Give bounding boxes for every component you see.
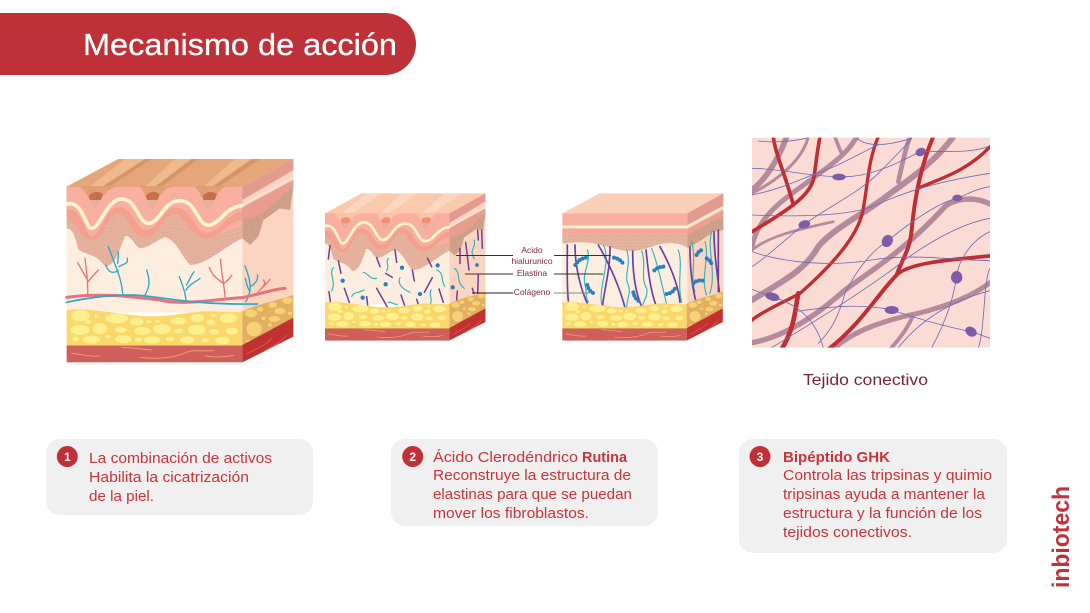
callout labels: skin components: Elastina [517, 268, 547, 278]
card 2: clerodendric acid and rutin: Rutina [582, 449, 628, 466]
card 2: clerodendric acid and rutin [391, 439, 658, 526]
card 1: combination of actives: Habilita la cicatrización [89, 469, 249, 486]
callout labels: skin components: hialurunico [511, 256, 553, 266]
skin block: dermis with collagen and elastin [325, 193, 485, 341]
card 1: combination of actives: 1 [64, 450, 71, 464]
card 3: GHK bipeptide: tripsinas ayuda a mantener la [783, 486, 986, 503]
card 3: GHK bipeptide: estructura y la función de los [783, 505, 982, 522]
card 2: clerodendric acid and rutin: mover los fibroblastos. [433, 505, 589, 522]
card 2: clerodendric acid and rutin: 2 [409, 450, 416, 464]
callout labels: skin components [456, 245, 611, 297]
card 3: GHK bipeptide: Bipéptido GHK [783, 449, 890, 466]
skin block: flat skin with restored fibres [562, 193, 723, 341]
card 1: combination of actives: de la piel. [89, 488, 154, 505]
card 2: clerodendric acid and rutin: Reconstruye la estructura de [433, 467, 631, 484]
panel caption: connective tissue: Tejido conectivo [803, 372, 928, 389]
callout labels: skin components: Acido [521, 245, 543, 255]
connective tissue panel [752, 137, 990, 349]
card 1: combination of actives [46, 439, 313, 515]
card 2: clerodendric acid and rutin: elastinas para que se puedan [433, 486, 632, 503]
brand wordmark: inbiotech [1048, 486, 1075, 588]
title banner: Mecanismo de acción [83, 27, 397, 62]
title banner [0, 13, 416, 75]
card 1: combination of actives: La combinación de activos [89, 450, 272, 467]
callout labels: skin components: Colágeno [514, 287, 550, 297]
card 3: GHK bipeptide: tejidos conectivos. [783, 524, 912, 541]
card 2: clerodendric acid and rutin: Ácido Clerodéndrico [433, 449, 578, 466]
card 3: GHK bipeptide: Controla las tripsinas y quimio [783, 467, 992, 484]
skin block: wound skin with vessels [67, 159, 293, 362]
card 3: GHK bipeptide: 3 [757, 450, 764, 464]
card 3: GHK bipeptide [739, 439, 1007, 553]
